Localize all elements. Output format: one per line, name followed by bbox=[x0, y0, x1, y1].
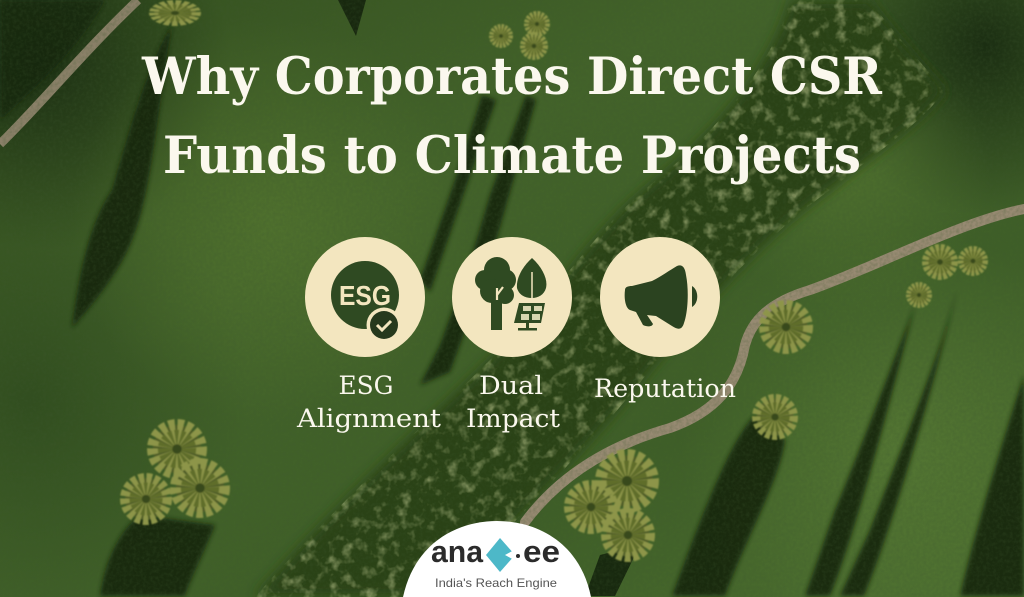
logo badge: ana bbox=[431, 534, 484, 569]
icon: reputation megaphone bbox=[600, 237, 720, 357]
title: Why Corporates Direct CSR bbox=[141, 47, 883, 107]
palm trees bbox=[125, 3, 985, 557]
label: ESG Alignment: Alignment bbox=[296, 404, 441, 433]
icon: ESG alignment: ESG bbox=[339, 280, 391, 311]
icon: ESG alignment bbox=[305, 237, 425, 357]
label: ESG Alignment: ESG bbox=[338, 371, 394, 400]
title: Funds to Climate Projects bbox=[163, 126, 861, 186]
label: Dual Impact: Impact bbox=[466, 404, 560, 433]
label: Dual Impact bbox=[466, 371, 560, 433]
vegetation band bbox=[256, 0, 942, 597]
icon: dual impact tree, leaf and solar panel bbox=[452, 237, 572, 357]
walking path upper left bbox=[0, 0, 138, 144]
logo badge: ee bbox=[523, 534, 560, 569]
title bbox=[141, 47, 883, 186]
logo badge bbox=[403, 521, 591, 597]
walking path right bbox=[525, 209, 1024, 522]
logo badge: India's Reach Engine bbox=[435, 576, 557, 590]
label: Dual Impact: Dual bbox=[479, 371, 543, 400]
label: ESG Alignment bbox=[296, 371, 441, 433]
label: Reputation: Reputation bbox=[594, 374, 736, 403]
